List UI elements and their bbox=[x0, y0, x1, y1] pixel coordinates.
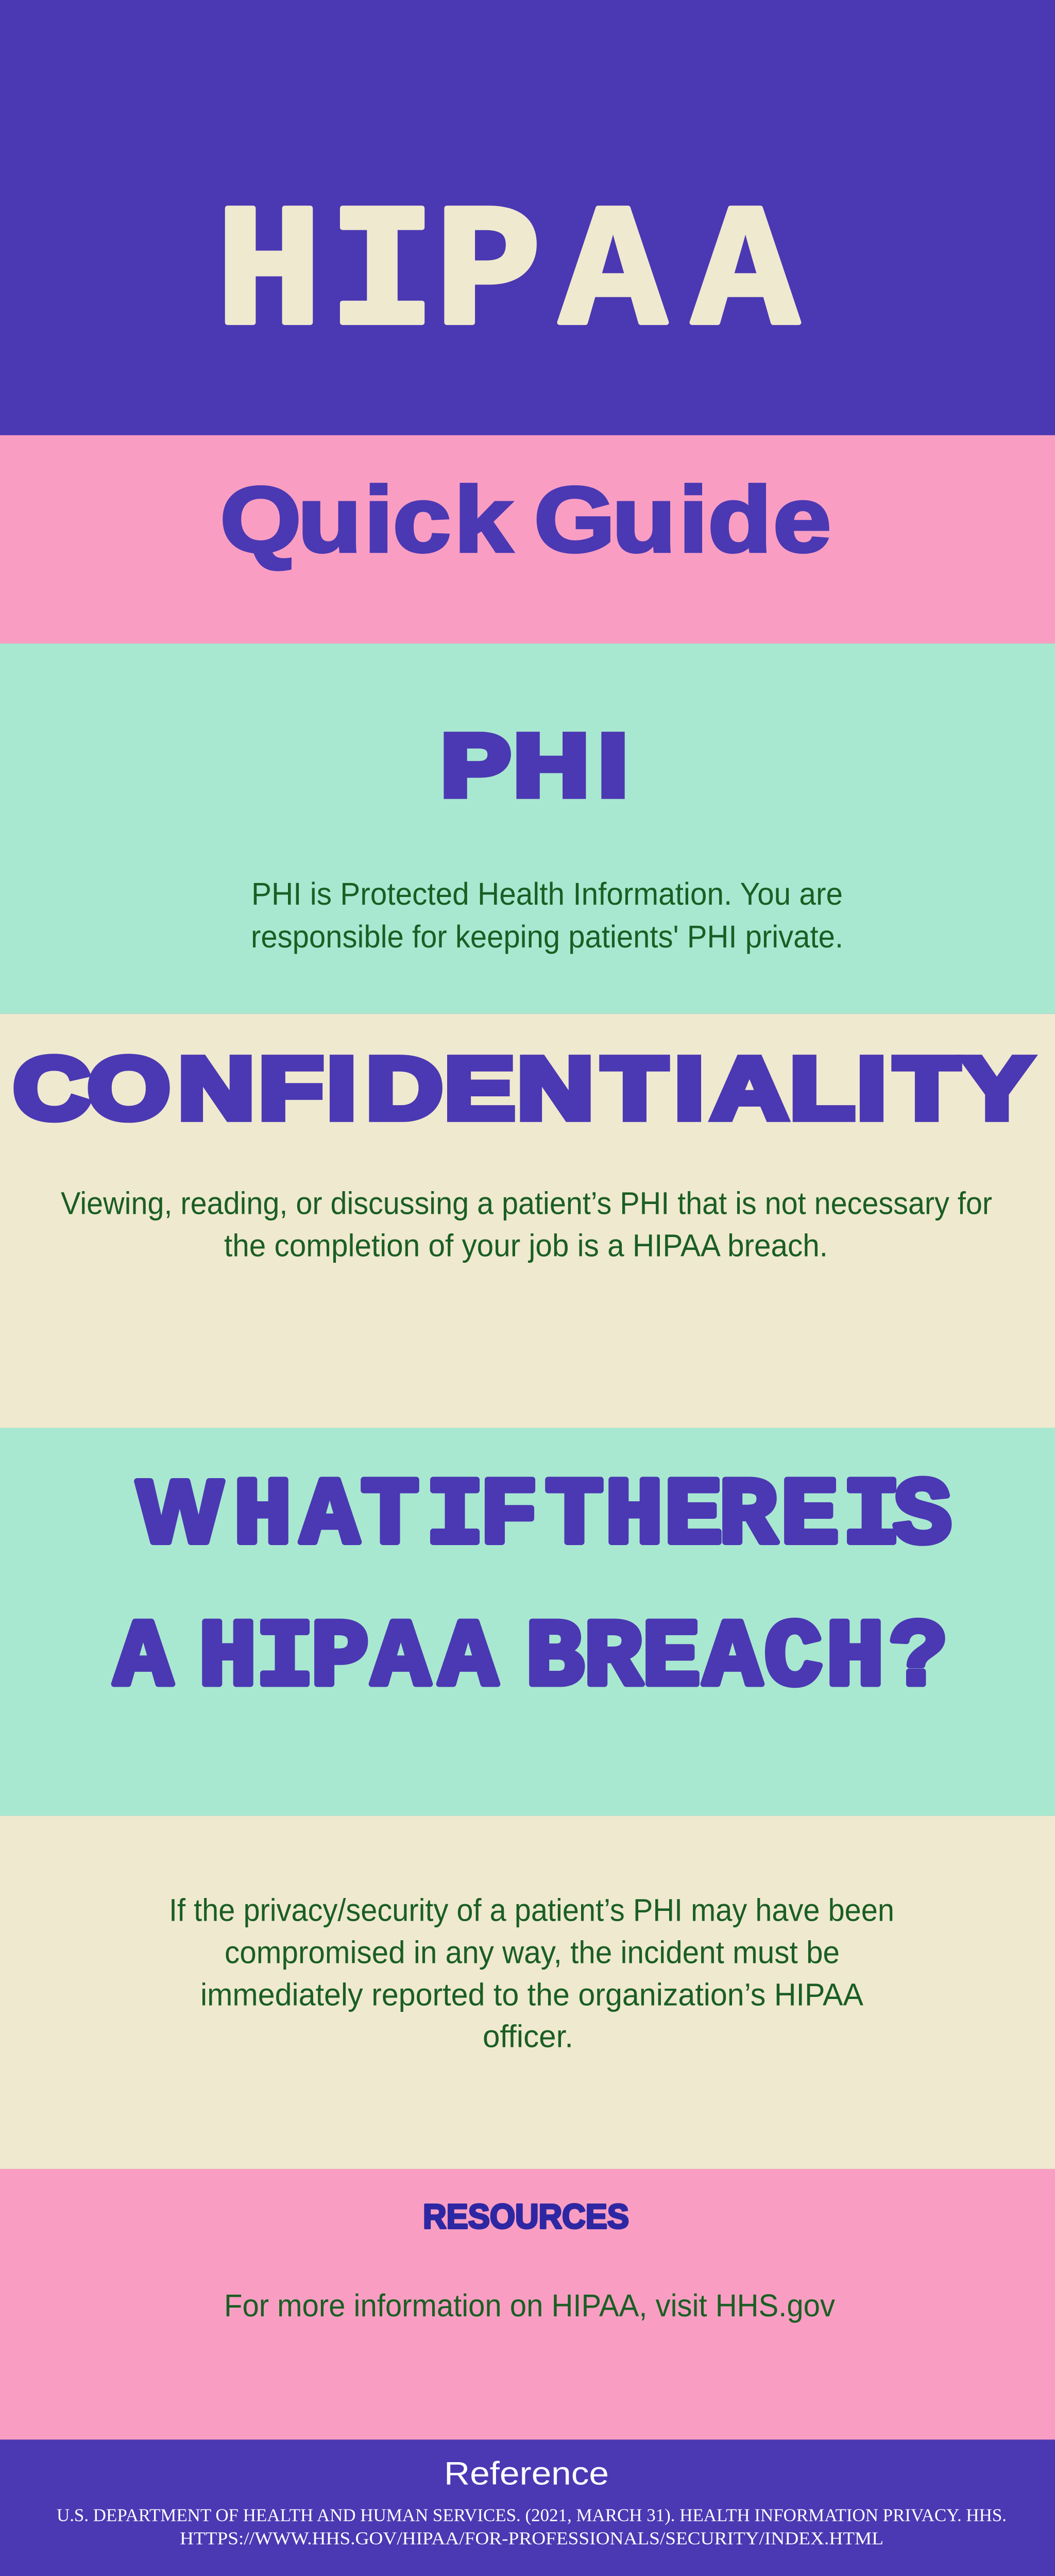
text: breach reporting instructions: officer. bbox=[483, 2019, 573, 2054]
heading: WHAT IF THERE IS A HIPAA BREACH? bbox=[114, 1462, 951, 1713]
text: breach reporting instructions: If the privacy/security of a patient’s PHI may have been bbox=[169, 1893, 894, 1928]
panel: reference footer bbox=[0, 2439, 1055, 2576]
heading: CONFIDENTIALITY: CONFIDENTIALITY bbox=[13, 1039, 1032, 1137]
text: confidentiality explanation: Viewing, reading, or discussing a patient’s PHI that is not necessary for bbox=[61, 1186, 992, 1221]
text: confidentiality explanation bbox=[61, 1186, 992, 1263]
text: breach reporting instructions: immediately reported to the organization’s HIPAA bbox=[200, 1977, 863, 2012]
panel: PHI bbox=[0, 643, 1055, 1014]
panel: resources bbox=[0, 2169, 1055, 2439]
panel: title band bbox=[0, 0, 1055, 435]
heading: PHI: PHI bbox=[441, 716, 627, 814]
text: resources link: For more information on HIPAA, visit HHS.gov bbox=[224, 2289, 835, 2324]
heading: RESOURCES: RESOURCES bbox=[423, 2198, 629, 2236]
panel: breach action bbox=[0, 1816, 1055, 2169]
heading: WHAT IF THERE IS A HIPAA BREACH?: W bbox=[137, 1462, 223, 1561]
text: PHI definition: responsible for keeping patients' PHI private. bbox=[251, 920, 843, 955]
text: citation: U.S. DEPARTMENT OF HEALTH AND HUMAN SERVICES. (2021, MARCH 31). HEALTH INFORMATION PRIVACY. HHS. bbox=[57, 2505, 1007, 2525]
text: breach reporting instructions: compromised in any way, the incident must be bbox=[225, 1935, 840, 1970]
title: HIPAA: HIPAA bbox=[215, 178, 801, 375]
heading: WHAT IF THERE IS A HIPAA BREACH?: HAT IF THERE IS bbox=[234, 1463, 951, 1570]
text: confidentiality explanation: the completion of your job is a HIPAA breach. bbox=[224, 1228, 828, 1263]
heading: Quick Guide: Quick Guide bbox=[220, 468, 831, 571]
panel: confidentiality bbox=[0, 1014, 1055, 1428]
text: citation: HTTPS://WWW.HHS.GOV/HIPAA/FOR-PROFESSIONALS/SECURITY/INDEX.HTML bbox=[180, 2528, 883, 2548]
heading: WHAT IF THERE IS A HIPAA BREACH?: A HIPAA BREACH? bbox=[114, 1605, 947, 1713]
panel: subtitle band bbox=[0, 435, 1055, 643]
text: citation bbox=[57, 2505, 1007, 2548]
heading: Reference: Reference bbox=[444, 2455, 609, 2492]
text: PHI definition: PHI is Protected Health Information. You are bbox=[251, 877, 843, 912]
panel: breach question bbox=[0, 1428, 1055, 1816]
text: breach reporting instructions bbox=[169, 1893, 894, 2054]
text: PHI definition bbox=[251, 877, 843, 955]
